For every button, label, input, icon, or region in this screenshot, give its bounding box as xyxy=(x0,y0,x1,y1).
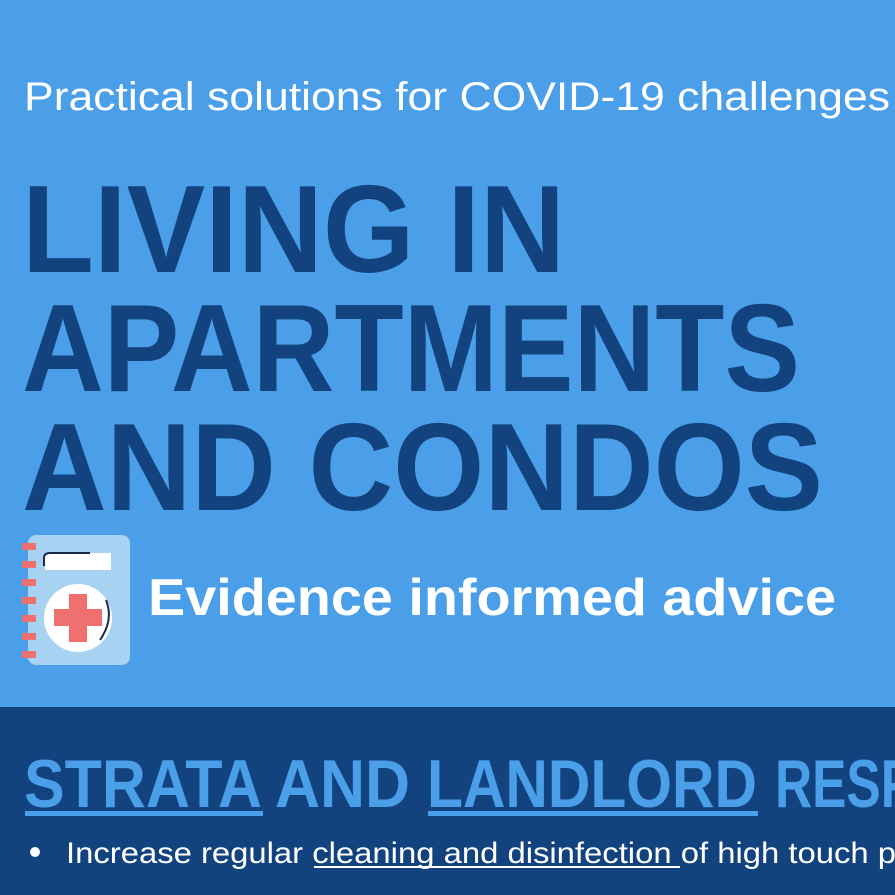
title: AND CONDOS xyxy=(22,399,823,537)
panel: strata and landlord responsibilities xyxy=(0,707,895,895)
heading: evidence informed advice: Evidence informed advice xyxy=(148,569,836,627)
title: LIVING IN xyxy=(22,161,565,299)
section heading: LANDLORD xyxy=(427,746,757,822)
section heading xyxy=(24,746,895,822)
title: APARTMENTS xyxy=(22,280,800,418)
icon: medical notepad xyxy=(22,535,130,665)
section heading: STRATA xyxy=(24,746,262,822)
section heading: AND xyxy=(275,746,410,822)
subtitle: Practical solutions for COVID-19 challenges xyxy=(24,75,890,119)
bullet text: Increase regular cleaning and disinfection of high touch p xyxy=(66,837,895,870)
title xyxy=(22,161,823,537)
